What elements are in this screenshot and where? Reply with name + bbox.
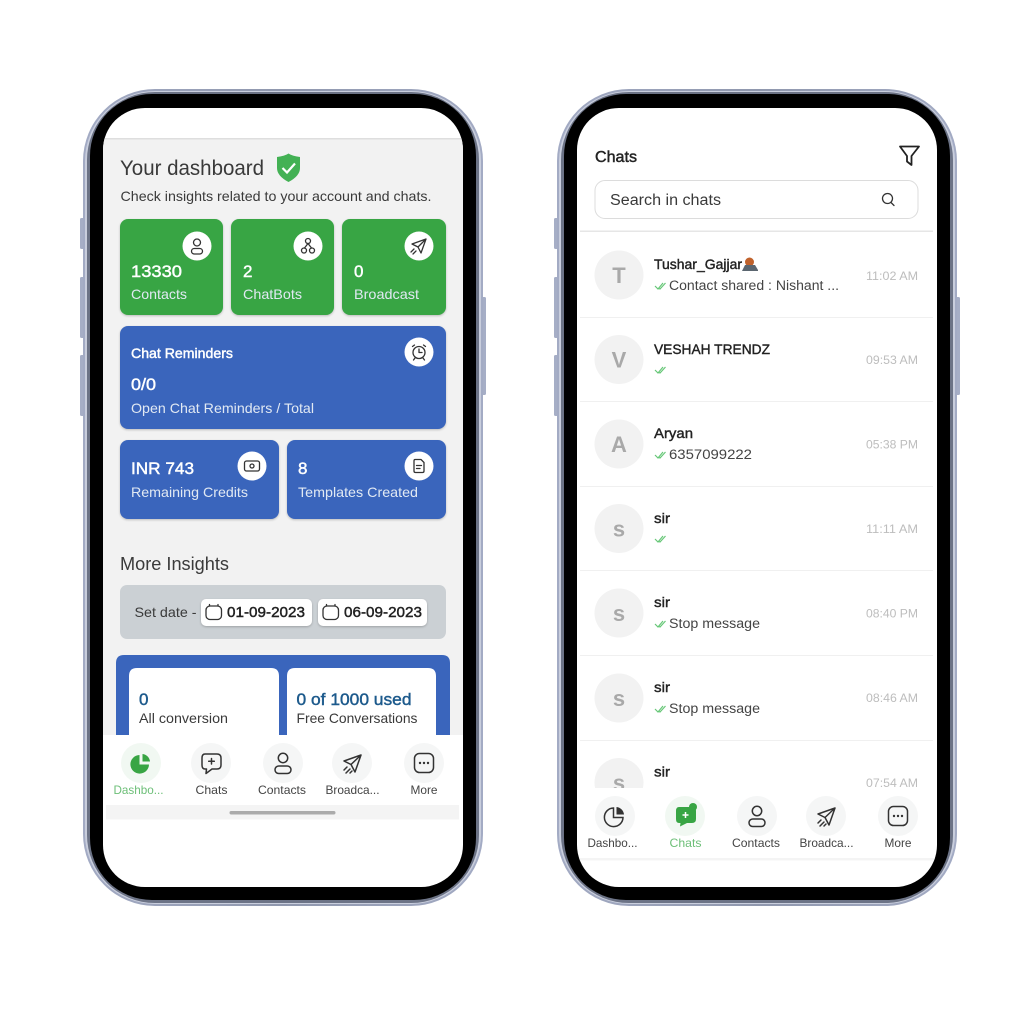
icon: contacts [749,806,765,826]
chat row: sir 08:40: s [613,601,625,626]
chat row: Aryan: 05:38 PM [866,438,918,452]
date filter: 06-09-2023 [344,605,422,621]
chat row: Tushar_Gajjar: T [612,263,626,288]
chat row: VESHAH TRENDZ: 09:53 AM [866,353,918,367]
bottom navigation: chats: More [884,836,912,850]
chat row: sir 08:46 [594,674,918,722]
chat row: Tushar_Gajjar: 11:02 AM [866,269,918,283]
chat row: VESHAH TRENDZ: VESHAH TRENDZ [654,341,770,357]
chat row: sir 07:54 [594,758,917,788]
icon: green shield [277,154,300,182]
card: chatbots [231,219,334,315]
search box [595,180,918,218]
bottom navigation: dashboard [114,743,444,797]
chat row: sir 08:40: 08:40 PM [866,606,918,620]
chat row: Aryan: 6357099222 [669,447,752,462]
chat row: sir 07:54: 07:54 AM [866,776,918,790]
heading: More Insights: More Insights [120,554,229,574]
chat row: sir 08:40 [594,588,918,638]
bottom navigation: dashboard: Dashbo... [114,783,164,797]
search box: Search in chats [610,192,721,209]
card: broadcast: 0 [354,262,363,281]
chat row: Aryan: A [611,432,627,457]
date filter: Set date - [134,604,197,620]
bottom navigation: chats: Broadca... [800,836,854,850]
icon: alarm clock [412,345,426,360]
card: contacts [120,219,223,315]
chat row: sir 07:54: sir [654,764,670,780]
bottom navigation: chats: Contacts [732,836,780,850]
card: templates created [287,440,446,519]
icon: delivered ticks [655,706,666,712]
icon: filter [900,146,919,165]
date filter [120,585,446,639]
bottom navigation: dashboard: Chats [196,783,228,797]
chat row: sir 08:46: Stop message [669,701,760,716]
icon: broadcast [344,755,361,773]
icon: dashboard [604,807,624,827]
chat row: sir 11:11 [594,504,918,553]
icon: chats [202,754,221,774]
phone frame [80,89,486,906]
insights panel [116,655,450,735]
phone: chats [554,89,960,906]
card: chat reminders: Chat Reminders [131,345,233,361]
insights panel: 0 [139,690,148,709]
chat row: Tushar_Gajjar [594,250,918,300]
card: contacts: Contacts [131,286,187,302]
bottom navigation: chats: Dashbo... [588,836,638,850]
icon: dashboard active [130,754,150,774]
chat row: sir 11:11: sir [654,510,670,526]
card: remaining credits: Remaining Credits [131,484,248,500]
phone frame [554,89,960,906]
icon: bot tree [302,238,314,253]
card: contacts: 13330 [131,262,182,281]
card: broadcast [342,219,446,315]
date filter: 01-09-2023 [227,605,305,621]
icon: more [414,754,434,772]
icon: calendar start [206,604,222,620]
bottom navigation: chats: Chats [670,836,702,850]
card: templates created: 8 [298,459,307,478]
icon: search [882,194,894,206]
chat row: sir 07:54: s [613,770,625,796]
home indicator bar [106,805,459,820]
chat row: sir 08:40: sir [654,594,670,610]
card: remaining credits: INR 743 [131,459,194,478]
card: remaining credits [120,440,279,519]
screen background [103,138,463,735]
icon: contacts [275,753,291,774]
card: broadcast: Broadcast [354,286,419,302]
chat row: sir 08:46: 08:46 AM [866,691,918,705]
bottom navigation: dashboard: Contacts [258,783,306,797]
chat row: sir 08:40: Stop message [669,616,760,631]
insights panel: Free Conversations [296,710,418,726]
card: chatbots: ChatBots [243,286,302,302]
chat row: Tushar_Gajjar: Contact shared : Nishant ... [669,278,839,293]
icon: banknote [244,461,260,471]
chat row: Aryan: Aryan [654,425,693,441]
icon: paper plane [411,239,426,254]
icon: more [888,806,908,826]
chat row: Tushar_Gajjar: Tushar_Gajjar [654,256,742,272]
icon: broadcast [818,808,835,826]
icon: delivered ticks [655,621,666,627]
icon: delivered ticks [655,283,666,289]
card: templates created: Templates Created [298,484,418,500]
heading: Chats: Chats [595,149,637,166]
heading: Your dashboard: Your dashboard [120,157,264,180]
card: chat reminders: 0/0 [131,375,156,394]
icon: contact [192,239,202,254]
insights panel: All conversion [139,710,228,726]
chat row: VESHAH TRENDZ: V [612,348,627,372]
icon: delivered ticks [655,367,666,373]
icon: delivered ticks [655,536,666,542]
insights panel: 0 of 1000 used [296,690,412,709]
chat row: sir 08:46: sir [654,679,670,695]
icon: delivered ticks [655,452,666,458]
bottom navigation: dashboard: More [410,783,438,797]
chat row: sir 11:11: s [613,516,625,542]
card: chatbots: 2 [243,262,252,281]
card: chat reminders [120,326,446,429]
chat row: Aryan [594,420,918,468]
icon: person at laptop [742,258,758,271]
card: chat reminders: Open Chat Reminders / Total [131,400,314,416]
bottom navigation: chats [588,796,918,850]
icon: calendar end [323,604,338,620]
chat row: sir 11:11: 11:11 AM [866,522,918,536]
chat row: VESHAH TRENDZ [594,335,918,384]
chat row: sir 08:46: s [613,686,625,711]
bottom navigation: dashboard: Broadca... [326,783,380,797]
icon: document [414,460,424,472]
subheading: Check insights related to your account and chats. [120,188,432,204]
icon: chats active [676,803,697,826]
phone: dashboard [80,89,486,906]
